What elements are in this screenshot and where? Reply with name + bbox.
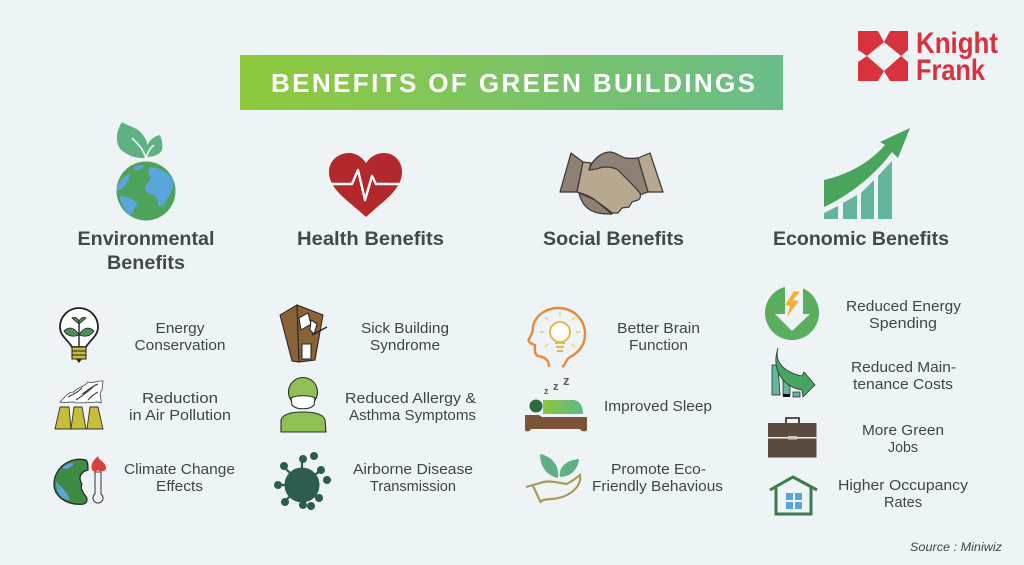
title banner bbox=[240, 55, 783, 110]
icon: globe with leaves bbox=[116, 122, 176, 220]
text: more green jobs bbox=[862, 422, 944, 456]
text: energy conservation bbox=[134, 320, 226, 354]
logo: Knight Frank: Frank bbox=[916, 54, 985, 87]
text: reduced energy spending: Reduced Energy bbox=[846, 298, 962, 315]
item: better brain function bbox=[529, 308, 700, 367]
text: reduced maintenance costs: tenance Costs bbox=[853, 376, 953, 393]
text: sick building syndrome: Syndrome bbox=[370, 337, 440, 354]
text: promote eco-friendly behavious: Friendly Behavious bbox=[592, 478, 723, 495]
text: sick building syndrome: Sick Building bbox=[361, 320, 449, 337]
item: promote eco-friendly behaviours bbox=[526, 454, 723, 503]
text: energy conservation: Energy bbox=[156, 320, 205, 337]
title banner: BENEFITS OF GREEN BUILDINGS bbox=[271, 68, 755, 98]
text: reduced allergy and asthma bbox=[345, 390, 476, 424]
source note: Source : Miniwiz bbox=[910, 540, 1002, 554]
icon: crooked building bbox=[280, 305, 327, 362]
text: airborne disease transmission: Transmission bbox=[370, 478, 456, 495]
icon: sleeping in bed: z bbox=[544, 386, 549, 396]
heading: health benefits: Health Benefits bbox=[297, 229, 444, 250]
item: improved sleep bbox=[525, 373, 712, 431]
icon: rising arrow chart bbox=[824, 128, 910, 219]
icon: melting earth and thermometer bbox=[54, 456, 106, 504]
item: reduced maintenance costs bbox=[772, 348, 956, 397]
text: better brain function bbox=[617, 320, 700, 354]
text: higher occupancy rates: Higher Occupancy bbox=[838, 477, 969, 494]
text: reduced allergy and asthma: Asthma Symptoms bbox=[349, 407, 476, 424]
text: reduced energy spending: Spending bbox=[869, 315, 937, 332]
item: reduced energy spending bbox=[765, 286, 962, 340]
text: better brain function: Function bbox=[629, 337, 688, 354]
text: promote eco-friendly behavious: Promote Eco- bbox=[611, 461, 706, 478]
heading: social benefits: Social Benefits bbox=[543, 229, 684, 250]
text: promote eco-friendly behavious bbox=[592, 461, 723, 495]
text: reduction in air pollution: in Air Pollution bbox=[129, 407, 231, 424]
icon: plant bulb bbox=[60, 308, 98, 363]
item: reduction in air pollution bbox=[55, 381, 231, 429]
icon: head with light bulb bbox=[529, 308, 585, 367]
icon: sleeping in bed: z bbox=[563, 373, 570, 388]
item: reduced allergy and asthma symptoms bbox=[281, 378, 476, 432]
icon: factory stacks bbox=[55, 381, 103, 429]
text: energy conservation: Conservation bbox=[134, 337, 226, 354]
icon: heart bbox=[329, 153, 402, 217]
text: higher occupancy rates: Rates bbox=[884, 494, 922, 511]
heading: economic benefits: Economic Benefits bbox=[773, 229, 949, 250]
text: more green jobs: More Green bbox=[862, 422, 944, 439]
text: reduced maintenance costs: Reduced Main- bbox=[851, 359, 956, 376]
text: climate change effects: Effects bbox=[156, 478, 203, 495]
icon: down arrow with lightning bbox=[765, 286, 819, 340]
text: reduction in air pollution bbox=[129, 390, 231, 424]
item: higher occupancy rates bbox=[770, 477, 969, 514]
icon: house bbox=[770, 477, 817, 514]
text: better brain function: Better Brain bbox=[617, 320, 700, 337]
icon: virus bbox=[274, 452, 330, 510]
item: more green jobs bbox=[768, 418, 944, 458]
item: sick building syndrome bbox=[280, 305, 449, 362]
icon: hand holding leaves bbox=[526, 454, 580, 503]
icon: briefcase bbox=[768, 418, 816, 458]
text: airborne disease transmission bbox=[353, 461, 473, 495]
icon: falling chart arrow bbox=[772, 348, 815, 397]
text: reduced allergy and asthma: Reduced Allergy & bbox=[345, 390, 476, 407]
logo: Knight Frank bbox=[858, 27, 998, 87]
logo: Knight Frank: Knight bbox=[916, 27, 998, 60]
heading: environmental benefits bbox=[78, 229, 214, 274]
icon: sleeping in bed: z bbox=[553, 381, 559, 393]
text: more green jobs: Jobs bbox=[888, 439, 918, 456]
heading: environmental benefits: Environmental bbox=[78, 229, 214, 250]
item: climate change effects bbox=[54, 456, 235, 504]
text: airborne disease transmission: Airborne Disease bbox=[353, 461, 473, 478]
icon: sleeping in bed bbox=[525, 373, 587, 431]
text: sick building syndrome bbox=[361, 320, 449, 354]
text: reduction in air pollution: Reduction bbox=[142, 390, 218, 407]
text: reduced maintenance costs bbox=[851, 359, 956, 393]
icon: person with mask bbox=[281, 378, 326, 432]
text: climate change effects: Climate Change bbox=[124, 461, 235, 478]
text: climate change effects bbox=[124, 461, 235, 495]
text: reduced energy spending bbox=[846, 298, 962, 332]
item: energy conservation bbox=[60, 308, 226, 363]
text: improved sleep: Improved Sleep bbox=[604, 398, 712, 415]
icon: handshake bbox=[560, 152, 663, 214]
heading: environmental benefits: Benefits bbox=[107, 253, 185, 274]
item: airborne disease transmission bbox=[274, 452, 473, 510]
text: higher occupancy rates bbox=[838, 477, 969, 511]
